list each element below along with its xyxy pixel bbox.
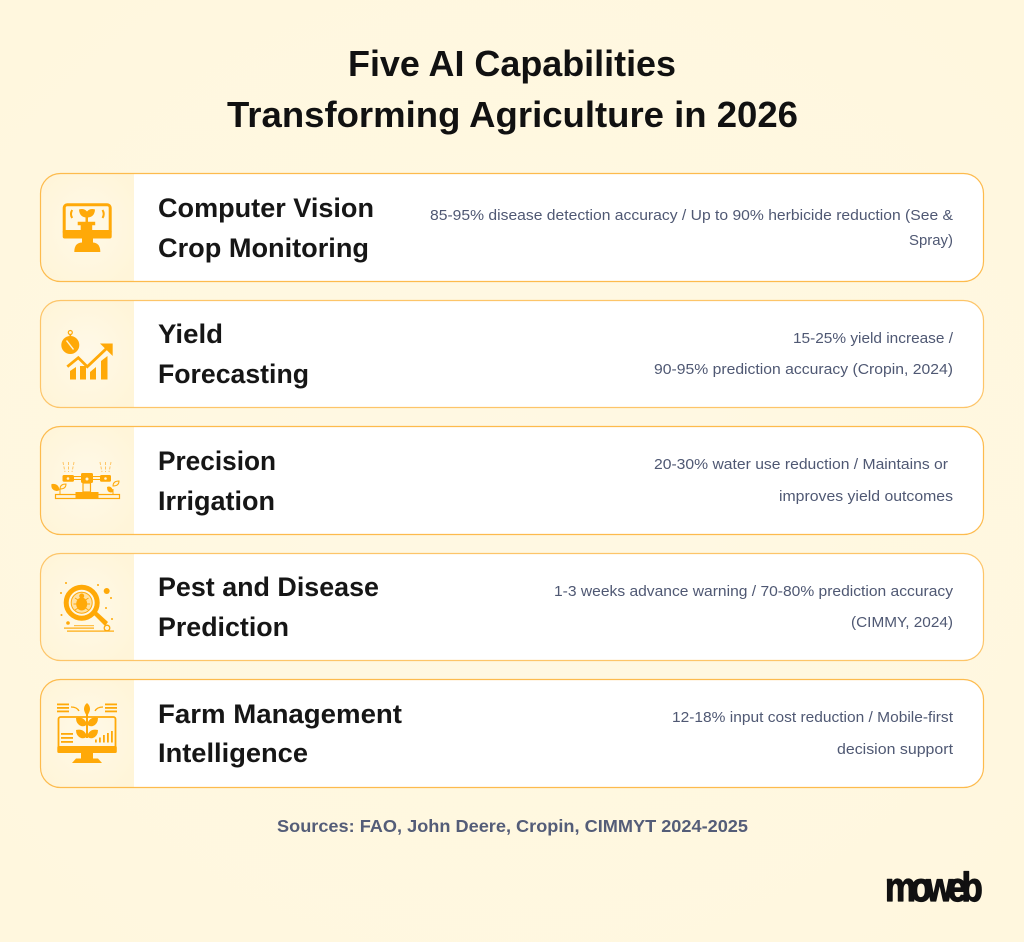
description: 12-18% input cost reduction / Mobile-first	[672, 709, 954, 726]
icon: growth chart with compass	[61, 330, 113, 380]
heading	[158, 446, 276, 516]
heading: Prediction	[158, 612, 289, 642]
sources note: Sources: FAO, John Deere, Cropin, CIMMYT 2024-2025	[277, 816, 748, 836]
description: 90-95% prediction accuracy (Cropin, 2024)	[654, 361, 953, 378]
description: 1-3 weeks advance warning / 70-80% prediction accuracy	[554, 583, 954, 600]
icon: irrigation system	[51, 462, 119, 499]
description: decision support	[837, 741, 954, 758]
heading: Farm Management	[158, 699, 402, 729]
panel: yield forecasting	[40, 300, 984, 408]
title: Five AI Capabilities	[348, 43, 676, 84]
panel: precision irrigation	[40, 426, 984, 535]
heading	[158, 319, 309, 389]
icon: monitor with seedling	[63, 205, 112, 252]
description: 85-95% disease detection accuracy / Up to 90% herbicide reduction (See &	[430, 207, 953, 224]
heading: Irrigation	[158, 486, 275, 516]
description	[654, 456, 953, 505]
heading: Crop Monitoring	[158, 233, 369, 263]
description: (CIMMY, 2024)	[851, 614, 953, 631]
heading: Yield	[158, 319, 223, 349]
heading: Precision	[158, 446, 276, 476]
description	[654, 330, 954, 378]
description	[554, 583, 954, 631]
heading: Forecasting	[158, 359, 309, 389]
title: Transforming Agriculture in 2026	[227, 94, 798, 135]
description	[430, 207, 953, 249]
heading: Pest and Disease	[158, 572, 379, 602]
description: 20-30% water use reduction / Maintains or	[654, 456, 948, 473]
description	[672, 709, 954, 758]
description: improves yield outcomes	[779, 488, 953, 505]
panel: computer vision crop monitoring	[40, 173, 984, 282]
title	[227, 43, 798, 135]
heading: Computer Vision	[158, 193, 374, 223]
heading	[158, 193, 374, 263]
panel: farm management intelligence	[40, 679, 984, 788]
icon: monitor with plant and charts	[57, 703, 117, 763]
icon: magnifier with bug	[60, 582, 114, 632]
logo: moweb: moweb	[885, 865, 983, 911]
heading	[158, 699, 402, 768]
panel: pest and disease prediction	[40, 553, 984, 661]
heading: Intelligence	[158, 738, 308, 768]
description: Spray)	[909, 232, 953, 249]
description: 15-25% yield increase /	[793, 330, 954, 347]
heading	[158, 572, 379, 642]
